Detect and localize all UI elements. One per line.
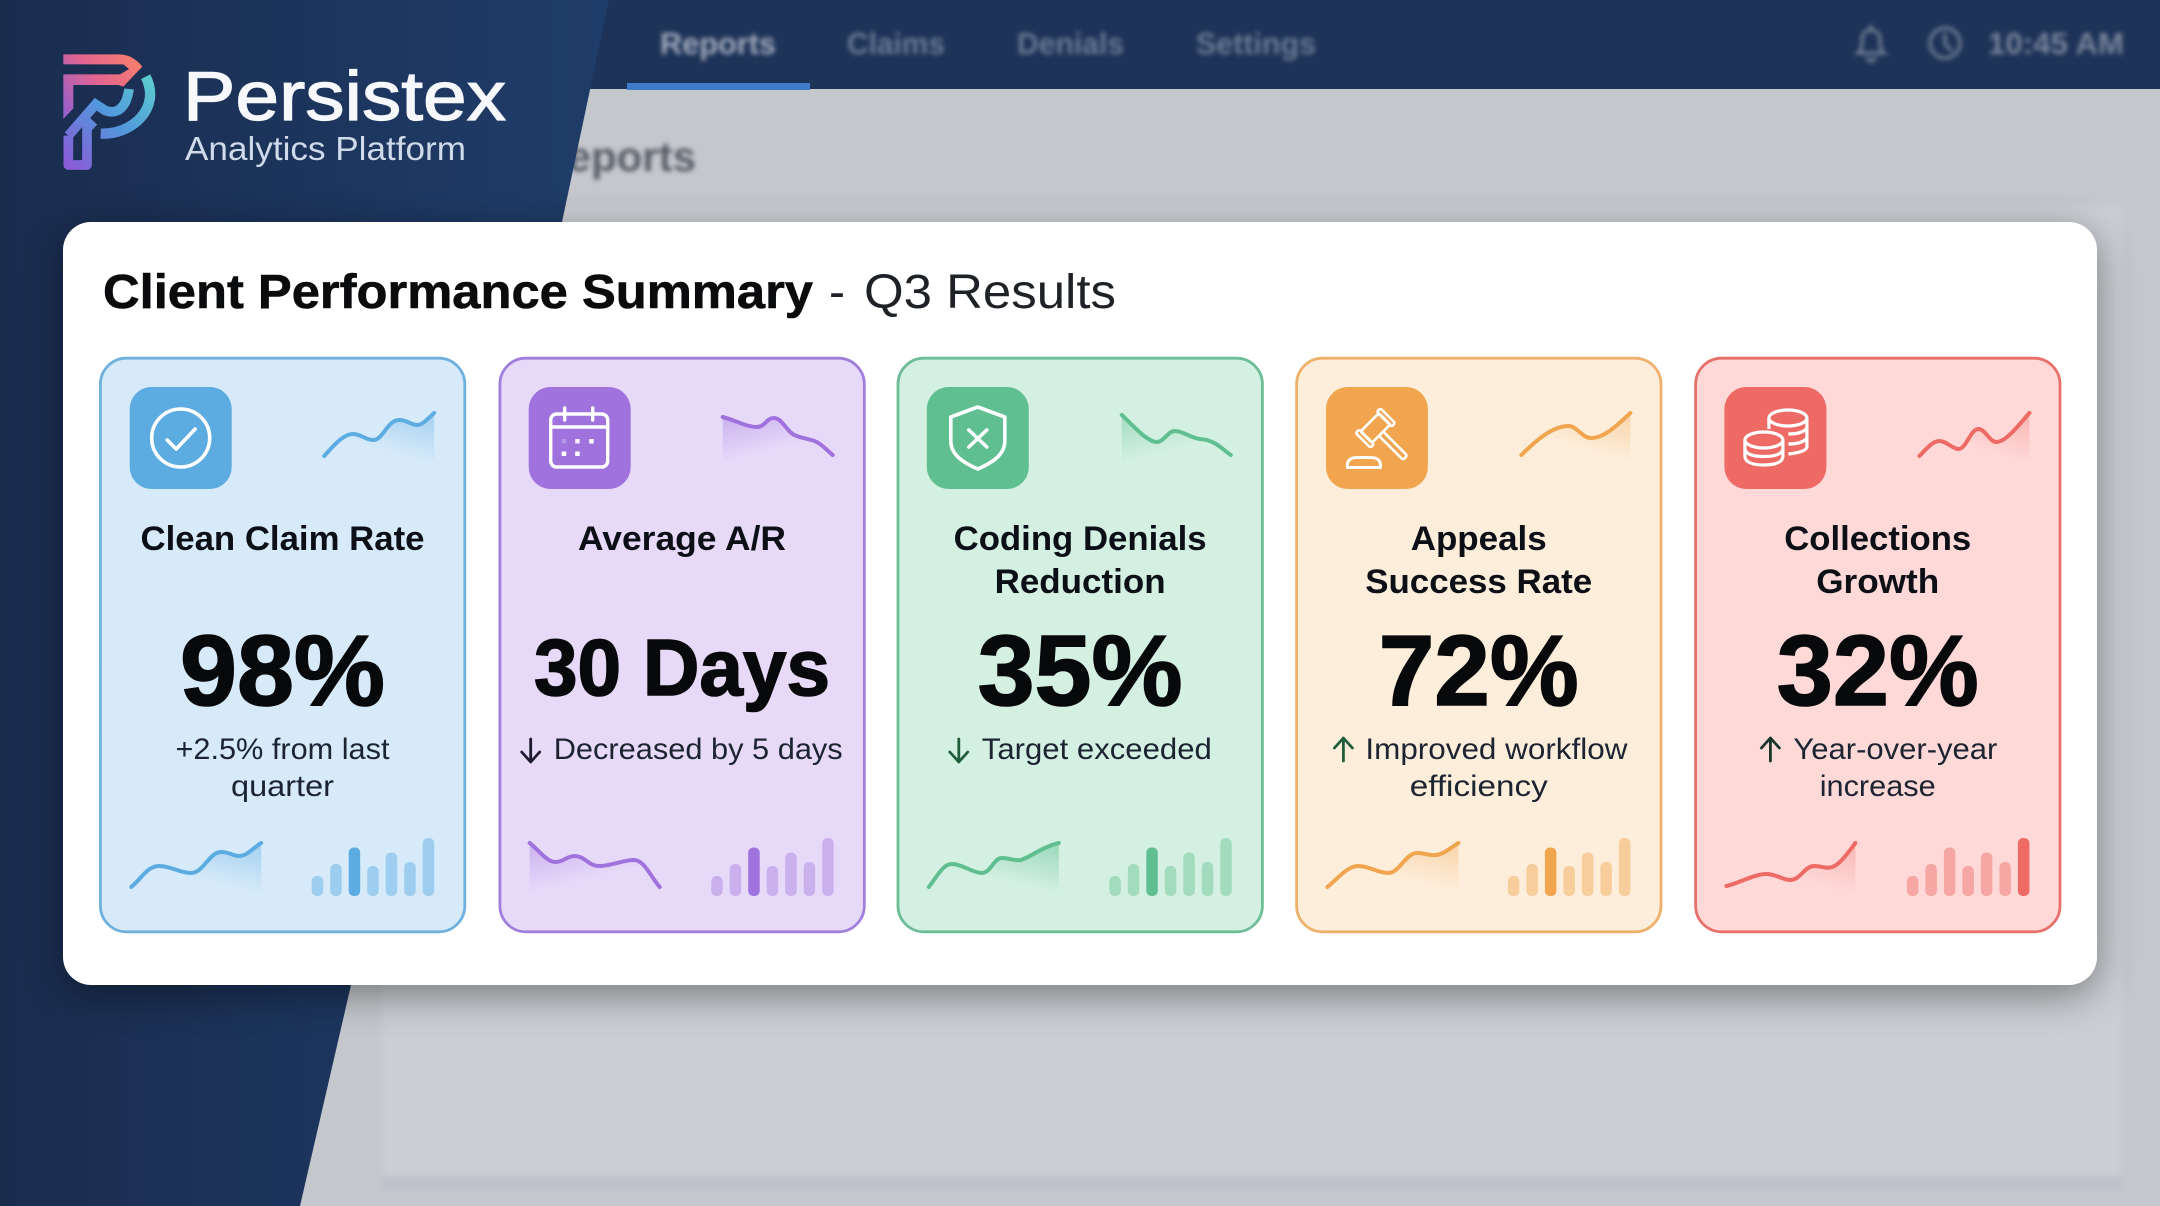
bottom sparkline	[929, 843, 1059, 891]
metric label: Coding Denials	[954, 520, 1207, 558]
top sparkline	[723, 417, 833, 461]
brand tagline: Analytics Platform	[185, 130, 466, 167]
panel: coding denials reduction	[898, 358, 1262, 932]
bar chart	[312, 838, 434, 896]
metric label: Growth	[1816, 563, 1939, 601]
metric label: Clean Claim Rate	[141, 520, 425, 558]
top sparkline	[1122, 415, 1231, 461]
icon: calendar	[529, 387, 631, 489]
metric value: 32%	[1777, 615, 1979, 727]
metric label: Reduction	[995, 563, 1166, 601]
bar chart	[1508, 838, 1630, 896]
metric note: Decreased by 5 days	[554, 733, 843, 766]
blurred page heading: Reports	[537, 133, 696, 180]
metric label: Average A/R	[578, 520, 786, 558]
blurred top navigation bar: Reports	[660, 26, 776, 61]
panel: appeals success rate	[1297, 358, 1661, 932]
top sparkline	[1919, 413, 2029, 461]
blurred top navigation bar	[0, 0, 2160, 90]
blurred top navigation bar: Settings	[1196, 26, 1316, 61]
navy angled side panel	[0, 0, 609, 1206]
top sparkline	[1521, 413, 1630, 461]
bottom sparkline	[1327, 843, 1458, 891]
metric label: Success Rate	[1365, 563, 1592, 601]
brand name: Persistex	[183, 57, 506, 135]
top sparkline	[324, 413, 434, 461]
icon: Persistex P mark	[63, 54, 150, 165]
bar chart	[1109, 838, 1232, 896]
panel: clean claim rate	[100, 358, 465, 932]
bottom sparkline	[1726, 843, 1855, 891]
title: Client Performance Summary	[103, 266, 813, 319]
metric label	[1784, 520, 1971, 601]
panel: summary	[63, 222, 2097, 995]
bar chart	[711, 838, 834, 896]
metric label	[954, 520, 1207, 601]
metric note	[1761, 733, 1997, 803]
icon: gavel	[1326, 387, 1428, 489]
metric note: +2.5% from last	[176, 733, 390, 766]
metric note: efficiency	[1410, 770, 1548, 803]
metric value: 72%	[1379, 615, 1579, 727]
metric label	[1365, 520, 1592, 601]
blurred top navigation bar: Denials	[1017, 26, 1124, 61]
metric label: Collections	[1784, 520, 1971, 558]
blurred top navigation bar: Claims	[847, 26, 945, 61]
metric note	[1334, 733, 1628, 803]
metric note: Improved workflow	[1365, 733, 1628, 766]
metric note: quarter	[231, 770, 334, 803]
icon: coin stacks	[1724, 387, 1826, 489]
blurred top navigation bar: 10:45 AM	[1988, 26, 2124, 61]
panel: collections growth	[1696, 358, 2060, 932]
bar chart	[1907, 838, 2029, 896]
metric value: 35%	[978, 615, 1183, 727]
metric note	[176, 733, 390, 803]
metric note: Target exceeded	[982, 733, 1212, 766]
bottom sparkline	[530, 843, 660, 891]
title: -	[829, 266, 845, 319]
title	[103, 266, 1116, 319]
brand logo lockup	[63, 54, 506, 167]
metric value: 98%	[180, 615, 385, 727]
icon: check circle	[130, 387, 232, 489]
title: Q3 Results	[864, 266, 1116, 319]
metric note: Year-over-year	[1793, 733, 1997, 766]
bottom sparkline	[131, 843, 261, 891]
panel: average A/R	[500, 358, 864, 932]
metric note: increase	[1820, 770, 1936, 803]
metric label: Appeals	[1411, 520, 1547, 558]
icon: shield with x	[927, 387, 1029, 489]
metric value: 30 Days	[534, 623, 830, 712]
